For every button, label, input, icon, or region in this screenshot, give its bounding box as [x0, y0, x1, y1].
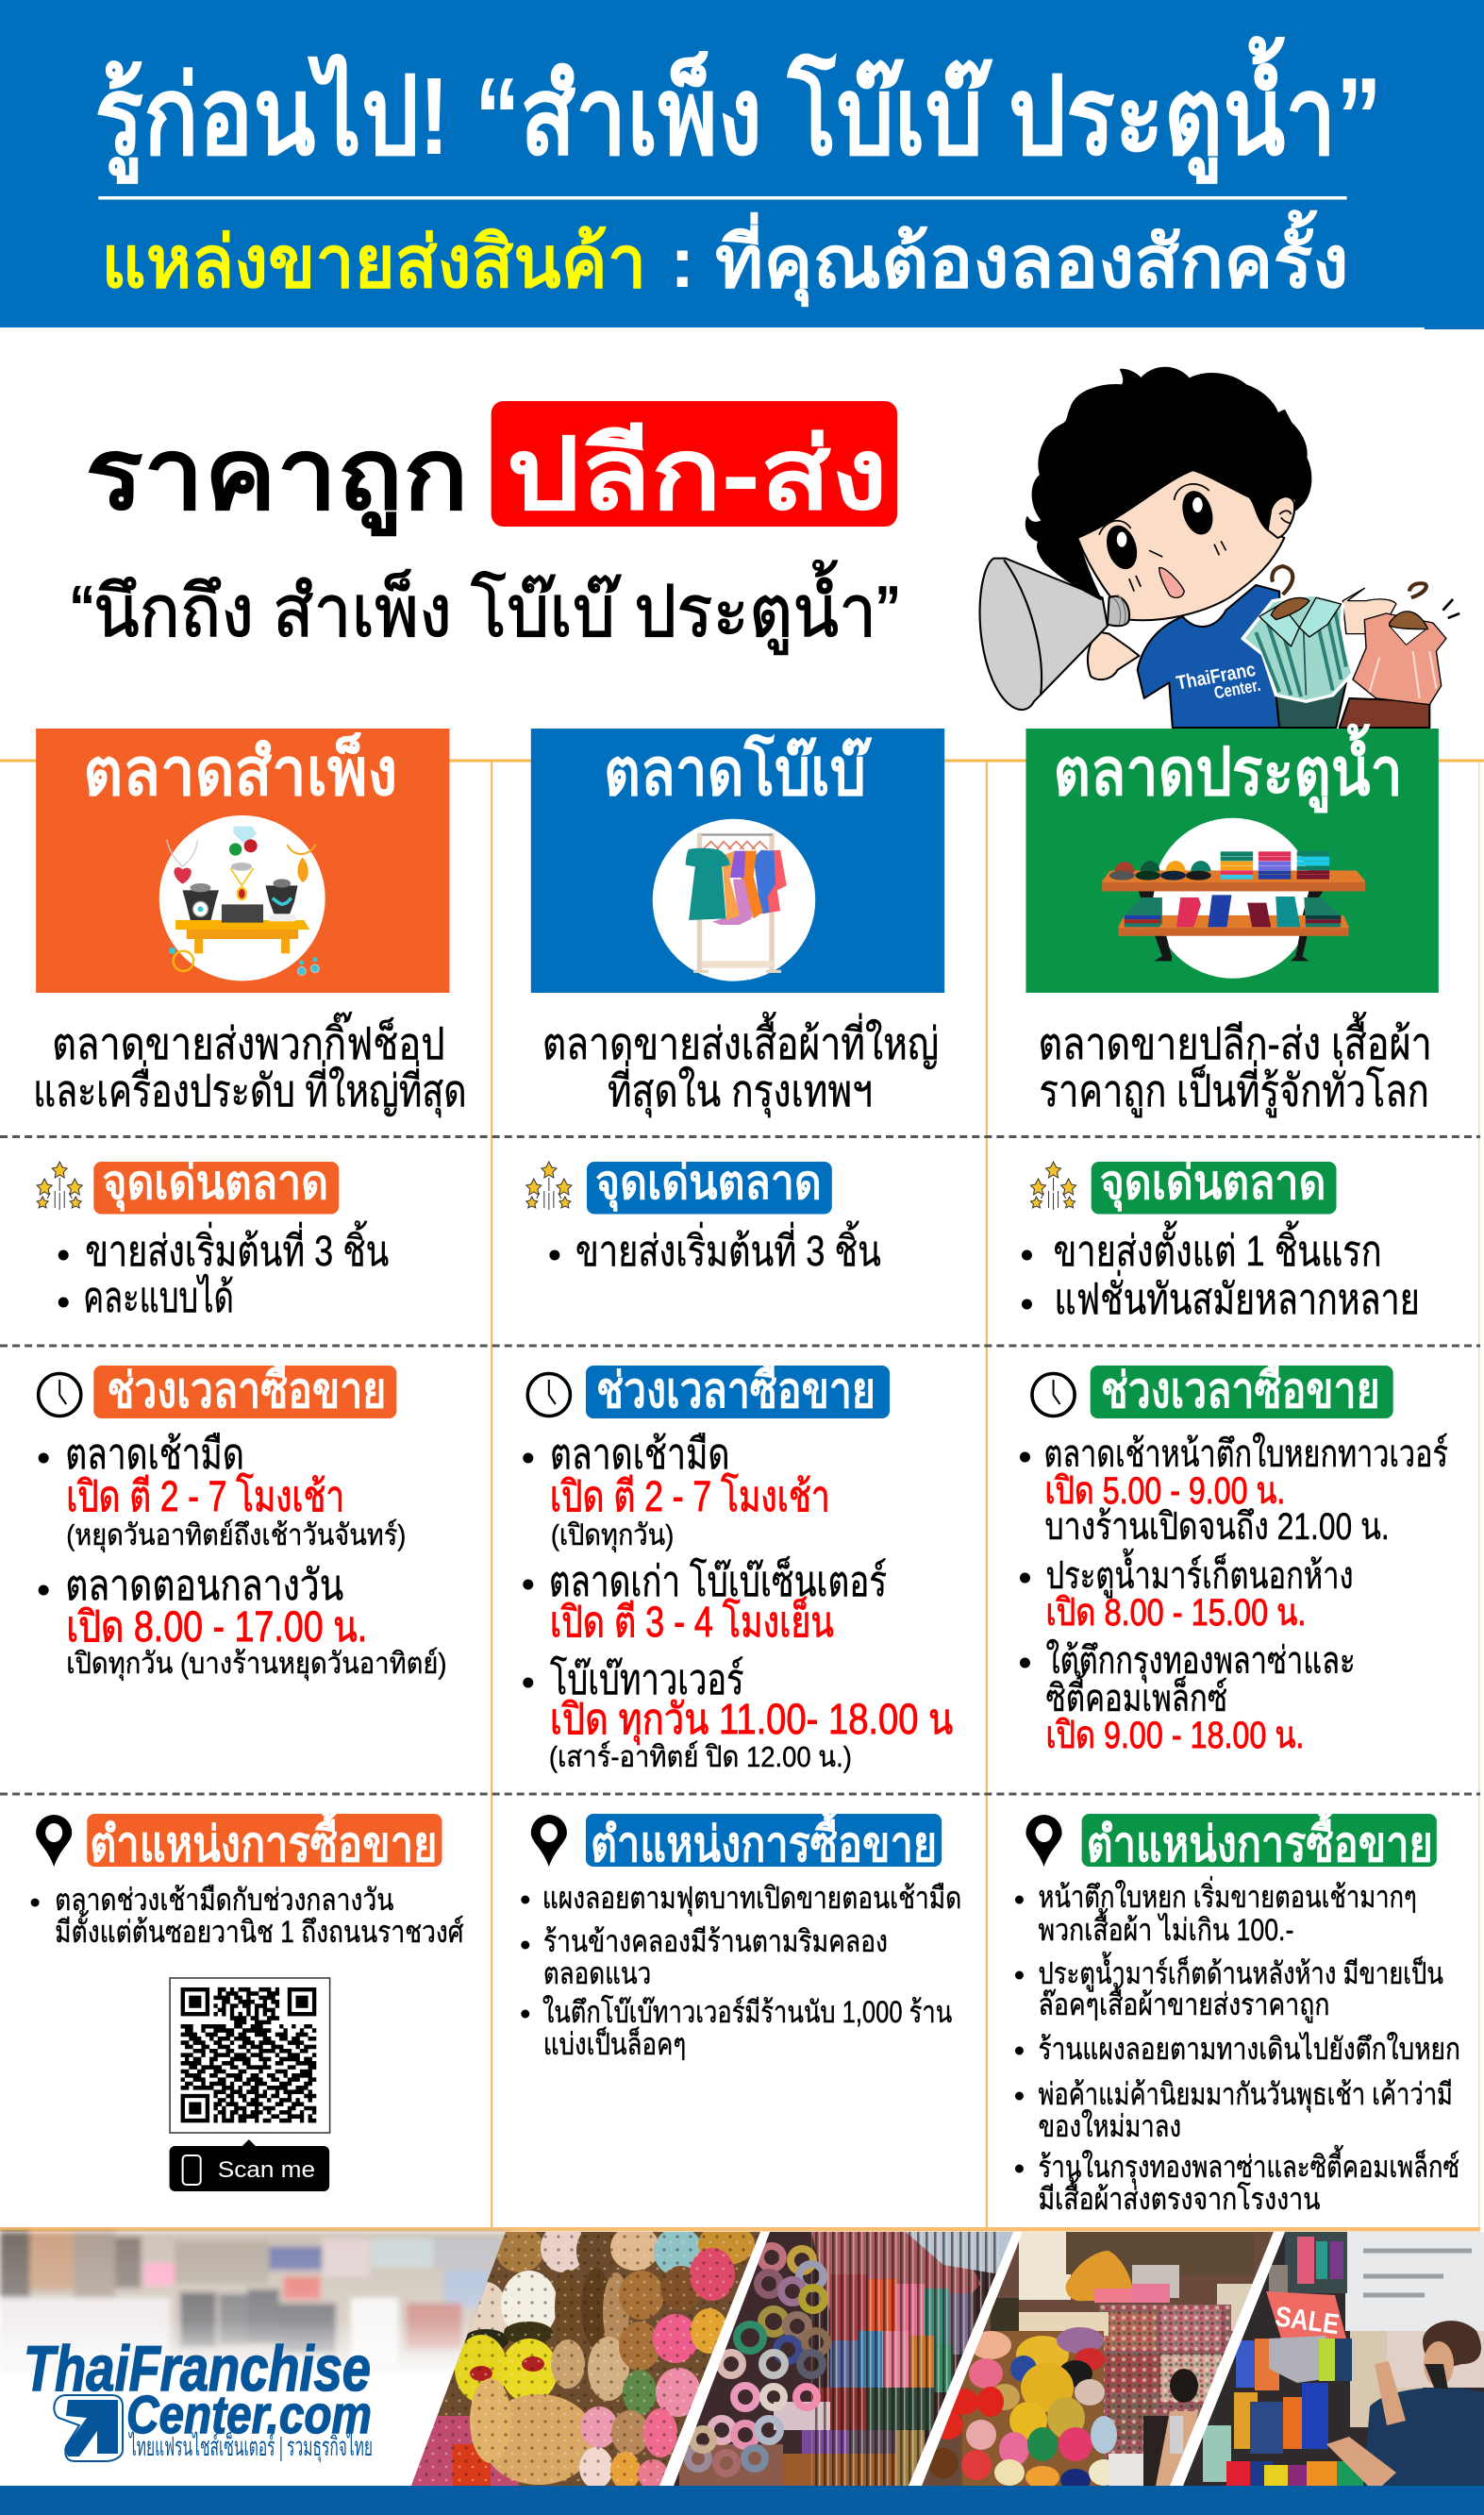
section: locations: มีตั้งแต่ต้นซอยวานิช 1 ถึงถนนราชวงศ์	[55, 1910, 464, 1949]
section: trading hours: (เปิดทุกวัน)	[551, 1518, 674, 1553]
icon: fireworks	[526, 1162, 572, 1210]
subtitle	[101, 210, 1349, 308]
icon: cartoon mascot with megaphone and clothes: Center.	[1212, 676, 1262, 703]
headline: cheap retail wholesale price: “นึกถึง สำเพ็ง โบ๊เบ๊ ประตูน้ำ”	[71, 560, 899, 655]
description	[542, 1012, 939, 1118]
logo: ThaiFranchise Center.com: Center.com	[126, 2385, 372, 2445]
section: highlights: ขายส่งตั้งแต่ 1 ชิ้นแรก	[1054, 1220, 1382, 1275]
section: highlights	[526, 1156, 881, 1275]
section: locations: พวกเสื้อผ้า ไม่เกิน 100.-	[1038, 1908, 1293, 1947]
header banner	[0, 0, 1484, 329]
section: locations	[31, 1808, 464, 1949]
section: trading hours: เปิด ตี 3 - 4 โมงเย็น	[550, 1597, 834, 1646]
scan me button	[170, 2139, 329, 2191]
headline: cheap retail wholesale price: ราคาถูก	[85, 419, 469, 537]
description: ตลาดขายส่งเสื้อผ้าที่ใหญ่	[542, 1012, 939, 1069]
photo: plush toys	[406, 2223, 764, 2490]
icon: clothing shelves	[1102, 851, 1365, 961]
section: locations: ของใหม่มาลง	[1038, 2109, 1181, 2143]
section: locations	[521, 1808, 961, 2061]
section: trading hours: เปิด 5.00 - 9.00 น.	[1045, 1470, 1285, 1512]
section: trading hours: ช่วงเวลาซื้อขาย	[107, 1354, 386, 1418]
description: ที่สุดใน กรุงเทพฯ	[608, 1060, 873, 1118]
icon: map pin	[36, 1815, 72, 1867]
section: highlights	[37, 1156, 389, 1321]
section: locations: ตำแหน่งการซื้อขาย	[591, 1808, 937, 1872]
scan me button: Scan me	[218, 2157, 315, 2183]
section: trading hours: ตลาดเช้ามืด	[65, 1430, 244, 1478]
photo: bracelets and beads	[660, 2232, 1019, 2487]
section: trading hours: ซิตี้คอมเพล็กซ์	[1046, 1670, 1227, 1719]
section: highlights: จุดเด่นตลาด	[1100, 1156, 1326, 1212]
icon: cartoon mascot with megaphone and clothes	[980, 368, 1459, 728]
section: highlights: คละแบบได้	[83, 1273, 234, 1321]
section: trading hours: ประตูน้ำมาร์เก็ตนอกห้าง	[1046, 1548, 1354, 1598]
icon: logo arrow	[54, 2395, 123, 2461]
icon: map pin	[1025, 1815, 1062, 1867]
icon: clock	[527, 1374, 570, 1416]
section: trading hours: เปิด 8.00 - 15.00 น.	[1046, 1592, 1306, 1634]
photo: keychains and pompoms	[920, 2232, 1278, 2491]
icon: jewellery display	[167, 827, 319, 975]
section: trading hours: เปิด ทุกวัน 11.00- 18.00 น	[550, 1695, 953, 1745]
description	[1038, 1012, 1432, 1118]
photo: clothing shop and shopper: SALE	[1273, 2301, 1341, 2340]
header card: Bobae	[531, 729, 944, 993]
header card: Bobae: ตลาดโบ๊เบ๊	[604, 732, 873, 809]
section: trading hours	[39, 1354, 447, 1682]
grid lines	[0, 759, 1484, 2231]
photo: clothing shop and shopper	[1179, 2232, 1484, 2490]
section: locations: มีเสื้อผ้าส่งตรงจากโรงงาน	[1038, 2177, 1321, 2216]
header card: Sampeng	[36, 729, 450, 993]
footer bar	[0, 2486, 1484, 2515]
section: trading hours: (เสาร์-อาทิตย์ ปิด 12.00 น.)	[549, 1740, 852, 1773]
section: highlights: จุดเด่นตลาด	[102, 1156, 328, 1212]
section: locations	[1015, 1808, 1460, 2216]
section: locations: ตลาดช่วงเช้ามืดกับช่วงกลางวัน	[55, 1883, 393, 1917]
description	[33, 1012, 467, 1118]
icon: map pin	[531, 1815, 567, 1867]
headline: cheap retail wholesale price: ปลีก-ส่ง	[507, 419, 888, 530]
section: trading hours	[523, 1354, 953, 1773]
description: ตลาดขายส่งพวกกิ๊ฟช็อป	[52, 1012, 444, 1068]
icon: clothes rack	[686, 833, 787, 973]
header card: Sampeng: ตลาดสำเพ็ง	[83, 731, 397, 809]
section: locations: แบ่งเป็นล็อคๆ	[543, 2026, 686, 2061]
description: และเครื่องประดับ ที่ใหญ่ที่สุด	[33, 1060, 467, 1118]
section: highlights: ขายส่งเริ่มต้นที่ 3 ชิ้น	[575, 1220, 881, 1275]
section: locations: แผงลอยตามฟุตบาทเปิดขายตอนเช้ามืด	[542, 1881, 961, 1917]
icon: cartoon mascot with megaphone and clothes: ThaiFranc	[1175, 658, 1258, 695]
section: trading hours: ตลาดตอนกลางวัน	[65, 1561, 343, 1609]
section: trading hours: เปิด ตี 2 - 7 โมงเช้า	[66, 1472, 344, 1520]
white slanted dividers	[659, 2232, 1285, 2486]
logo: ThaiFranchise Center.com	[24, 2333, 373, 2463]
section: trading hours: เปิด ตี 2 - 7 โมงเช้า	[550, 1472, 830, 1520]
section: highlights: ขายส่งเริ่มต้นที่ 3 ชิ้น	[85, 1220, 389, 1275]
section: locations: ล๊อคๆเสื้อผ้าขายส่งราคาถูก	[1038, 1983, 1329, 2023]
section: trading hours: ช่วงเวลาซื้อขาย	[1101, 1354, 1380, 1418]
subtitle: : ที่คุณต้องลองสักครั้ง	[670, 210, 1349, 308]
section: trading hours: เปิด 9.00 - 18.00 น.	[1046, 1715, 1304, 1756]
headline: cheap retail wholesale price	[71, 401, 899, 655]
header card: Pratunam: ตลาดประตูน้ำ	[1054, 723, 1403, 813]
logo: ThaiFranchise Center.com: ThaiFranchise	[24, 2333, 371, 2405]
section: trading hours	[1020, 1354, 1448, 1756]
section: trading hours: บางร้านเปิดจนถึง 21.00 น.	[1045, 1506, 1390, 1548]
section: trading hours: ตลาดเก่า โบ๊เบ๊เซ็นเตอร์	[549, 1556, 887, 1605]
section: highlights: จุดเด่นตลาด	[595, 1156, 822, 1212]
section: highlights	[1022, 1156, 1420, 1323]
section: trading hours: โบ๊เบ๊ทาวเวอร์	[550, 1655, 744, 1703]
icon: fireworks	[1030, 1162, 1076, 1210]
header card: Pratunam	[1025, 723, 1439, 993]
photo strip: market scenes	[0, 2223, 1484, 2491]
section: locations: ตลอดแนว	[543, 1956, 651, 1990]
section: locations: ร้านข้างคลองมีร้านตามริมคลอง	[543, 1924, 888, 1958]
photo: faded street market	[0, 2232, 528, 2486]
subtitle: แหล่งขายส่งสินค้า	[101, 223, 646, 303]
section: locations: ในตึกโบ๊เบ๊ทาวเวอร์มีร้านนับ 1,000 ร้าน	[542, 1995, 952, 2029]
section: trading hours: (หยุดวันอาทิตย์ถึงเช้าวันจันทร์)	[66, 1518, 406, 1553]
icon: clock	[39, 1374, 81, 1416]
section: trading hours: เปิดทุกวัน (บางร้านหยุดวันอาทิตย์)	[66, 1647, 447, 1682]
section: trading hours: ใต้ตึกกรุงทองพลาซ่าและ	[1046, 1638, 1356, 1684]
panel: Sampeng market	[31, 729, 467, 2191]
icon: fireworks	[37, 1162, 82, 1210]
panel: Pratunam market	[1015, 723, 1460, 2216]
section: trading hours: เปิด 8.00 - 17.00 น.	[66, 1602, 367, 1651]
section: locations: ตำแหน่งการซื้อขาย	[90, 1808, 437, 1872]
icon: clock	[1032, 1374, 1075, 1416]
logo: ThaiFranchise Center.com: ไทยแฟรนไชส์เซ็นเตอร์ | รวมธุรกิจไทย	[128, 2430, 373, 2463]
section: trading hours: ตลาดเช้ามืด	[550, 1430, 729, 1478]
QR code	[170, 1978, 330, 2133]
section: trading hours: ช่วงเวลาซื้อขาย	[596, 1354, 875, 1418]
panel: Bobae market	[521, 729, 961, 2061]
